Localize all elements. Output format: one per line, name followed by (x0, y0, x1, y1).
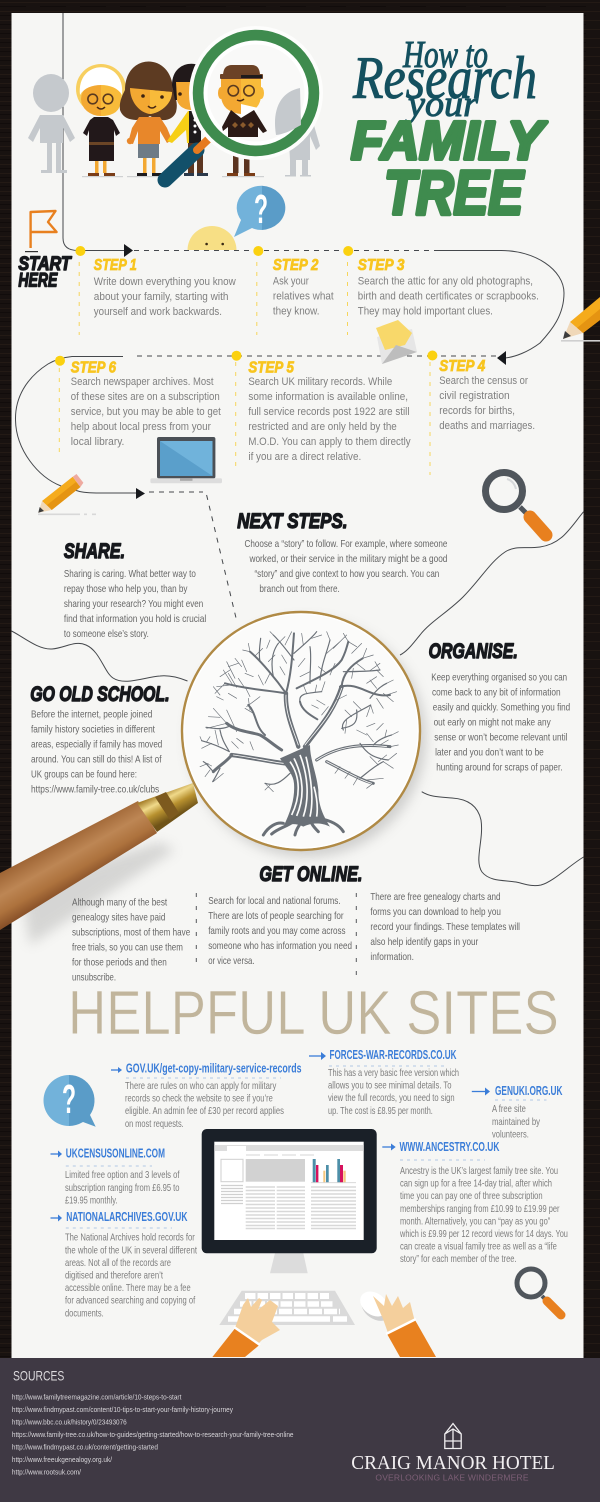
step 6: STEP 6 (71, 360, 116, 377)
share block (64, 540, 206, 640)
step 1: about your family, starting with (94, 291, 228, 303)
next steps block: NEXT STEPS. (237, 510, 348, 533)
sources list: http://www.findmypast.co.uk/content/getting-started (12, 1442, 158, 1452)
hotel logo (351, 1424, 555, 1483)
share block: find that information you hold is crucial (64, 613, 206, 625)
next steps block: Choose a “story” to follow. For example, where someone (244, 538, 448, 550)
site: genuki: A free site (492, 1103, 526, 1115)
site: forces war records: view the full records, you need to sign (328, 1092, 455, 1104)
get online column 1: for those periods and then (72, 957, 167, 969)
old man portrait (218, 65, 267, 137)
site: national archives: areas. Not all of the records are (65, 1257, 171, 1269)
step 4: Search the census or (439, 375, 528, 387)
get online column 3: There are free genealogy charts and (370, 891, 501, 903)
screen bar chart (311, 1159, 356, 1183)
site: genuki: volunteers. (492, 1128, 529, 1140)
step 2 (273, 257, 334, 318)
title (351, 34, 548, 228)
grey ancestor left (28, 74, 75, 173)
step 4: records for births, (439, 405, 515, 417)
site: forces war records: FORCES-WAR-RECORDS.CO.UK (330, 1048, 456, 1062)
next steps block: “story” and give context to how you search. You can (254, 568, 439, 580)
organise block: ORGANISE. (429, 640, 518, 663)
get online column 3: information. (370, 951, 414, 963)
sources list: http://www.familytreemagazine.com/article/10-steps-to-start (12, 1392, 182, 1402)
icon: pencil right (561, 297, 600, 342)
step 1: STEP 1 (94, 257, 137, 274)
icon: pencil left (38, 474, 96, 515)
hand on mouse (357, 1290, 395, 1326)
share block: sharing your research? You might even (64, 598, 203, 610)
share block: repay those who help you, than by (64, 583, 188, 595)
step 5 (248, 360, 411, 463)
illustration: family with magnifying glass (28, 26, 323, 180)
sources list: https://www.family-tree.co.uk/how-to-guides/getting-started/how-to-research-your-family-tree-online (12, 1430, 294, 1439)
site: forces war records (309, 1048, 459, 1117)
organise block (429, 640, 570, 774)
site: national archives: The National Archives hold records for (65, 1232, 195, 1244)
step 6: local library. (71, 436, 124, 448)
get online column 2: There are lots of people searching for (208, 910, 344, 922)
next steps block: worked, or their service in the military might be a good (249, 553, 448, 565)
get online column 2: someone who has information you need (208, 940, 352, 952)
site: genuki: GENUKI.ORG.UK (495, 1084, 562, 1098)
step 2: STEP 2 (273, 257, 318, 274)
step 4: deaths and marriages. (439, 420, 535, 432)
share block: to someone else’s story. (64, 628, 149, 640)
go old school block: areas, especially if family has moved (31, 739, 162, 751)
icon: question bubble (44, 1075, 96, 1127)
go old school block (30, 683, 170, 796)
hotel logo: OVERLOOKING LAKE WINDERMERE (375, 1473, 529, 1483)
get online column 2 (208, 895, 352, 967)
arrowheads (124, 244, 506, 499)
step 6 (71, 360, 221, 448)
grandmother (76, 64, 126, 177)
step 4: civil registration (439, 390, 510, 402)
step 5: Search UK military records. While (248, 376, 392, 388)
start here label: HERE (18, 271, 58, 292)
site: national archives: for advanced searching and copying of (65, 1295, 195, 1307)
site: genuki (472, 1084, 562, 1140)
icon: laptop (150, 437, 222, 483)
site: gov.uk (111, 1062, 302, 1130)
hotel logo: CRAIG MANOR HOTEL (351, 1452, 555, 1474)
start here label (18, 254, 72, 292)
icon: speech bubble with question mark: ? (254, 186, 268, 232)
get online column 2: or vice versa. (208, 955, 254, 967)
step 5: STEP 5 (248, 360, 295, 377)
organise block: out early on might not make any (434, 717, 551, 729)
site: gov.uk: on most requests. (125, 1118, 184, 1130)
grey figure seen through lens (275, 88, 301, 135)
get online column 3 (370, 891, 520, 963)
get online column 3: record your findings. These templates will (370, 921, 520, 933)
site: gov.uk: records so check the website to see if you’re (125, 1093, 273, 1105)
organise block: hunting around for scraps of paper. (436, 762, 562, 774)
large magnifying glass handle (0, 783, 198, 945)
site: ancestry: WWW.ANCESTRY.CO.UK (400, 1140, 499, 1154)
step 3: They may hold important clues. (358, 306, 493, 318)
step 3 (358, 257, 539, 318)
magnifier handle (165, 132, 216, 180)
site: ukcensusonline: UKCENSUSONLINE.COM (66, 1147, 165, 1161)
get online column 3: forms you can download to help you (370, 906, 501, 918)
site: genuki: maintained by (492, 1116, 541, 1128)
step 6: help about local press from your (71, 421, 211, 433)
site: national archives: the whole of the UK in several different (65, 1244, 197, 1256)
site: gov.uk: There are rules on who can apply for military (125, 1080, 277, 1092)
icon: search magnifier orange (486, 472, 546, 535)
step 5: M.O.D. You can apply to them directly (248, 436, 411, 448)
title: Research (352, 45, 537, 111)
step 6: Search newspaper archives. Most (71, 376, 214, 388)
step 5: full service records post 1922 are still (248, 406, 410, 418)
step 2: Ask your (273, 276, 309, 288)
go old school block: family history societies in different (31, 724, 155, 736)
go old school block: around. You can still do this! A list of (31, 754, 162, 766)
hand on keyboard (235, 1298, 280, 1344)
title: your (404, 84, 479, 125)
title: How to (402, 34, 488, 76)
organise block: sense or won’t become relevant until (434, 732, 568, 744)
site: gov.uk: GOV.UK/get-copy-military-service-records (126, 1062, 302, 1076)
site: ancestry: story” for each member of the tree. (400, 1253, 517, 1265)
sources list: http://www.bbc.co.uk/history/0/23493076 (12, 1418, 127, 1426)
step 4: STEP 4 (439, 358, 485, 375)
site: national archives (50, 1210, 197, 1319)
get online column 3: also help identify gaps in your (370, 936, 479, 948)
pathway lines (12, 13, 584, 977)
step 3: birth and death certificates or scrapbooks. (358, 290, 539, 302)
icon: start flag (25, 211, 57, 252)
site: ukcensusonline (50, 1147, 180, 1206)
step 1 (94, 257, 236, 318)
get online column 1: unsubscribe. (72, 972, 116, 984)
step 1: Write down everything you know (94, 276, 236, 288)
step 4 (439, 358, 535, 432)
step 3: STEP 3 (358, 257, 405, 274)
sources list (12, 1392, 294, 1476)
mother (120, 62, 177, 177)
grey descendant right (285, 122, 320, 176)
sources list: http://www.findmypast.com/content/10-tips-to-start-your-family-history-journey (12, 1405, 233, 1414)
step 5: if you are a direct relative. (248, 451, 361, 463)
get online column 1: free trials, so you can use them (72, 942, 183, 954)
father (167, 64, 208, 176)
step 5: restricted and are only held by the (248, 421, 397, 433)
icon: small search magnifier (517, 1269, 561, 1315)
site: national archives: digitised and therefore aren’t (65, 1270, 163, 1282)
step 5: some information is available online, (248, 391, 408, 403)
icon: envelope with note (376, 320, 417, 364)
icon: question bubble: ? (62, 1076, 76, 1122)
get online column 1: genealogy sites have paid (72, 912, 165, 924)
old man's legs (222, 150, 264, 177)
get online column 1 (72, 897, 190, 984)
get online heading: GET ONLINE. (259, 863, 362, 886)
sources list: http://www.freeukgenealogy.org.uk/ (12, 1455, 113, 1464)
site: ukcensusonline: Limited free option and 3 levels of (65, 1169, 180, 1181)
next steps block (237, 510, 448, 595)
go old school block: GO OLD SCHOOL. (30, 683, 170, 706)
sources heading: SOURCES (13, 1368, 64, 1384)
get online column 2: Search for local and national forums. (208, 895, 341, 907)
start here label: START (18, 254, 72, 275)
get online column 1: subscriptions, most of them have (72, 927, 190, 939)
title: FAMILY (351, 111, 548, 171)
sources list: http://www.rootsuk.com/ (12, 1468, 82, 1476)
go old school block: Before the internet, people joined (31, 709, 152, 721)
organise block: later and you don’t want to be (435, 747, 544, 759)
site: national archives: documents. (65, 1307, 104, 1319)
site: forces war records: allows you to see minimal details. To (328, 1080, 452, 1092)
get online column 1: Although many of the best (72, 897, 167, 909)
go old school block: UK groups can be found here: (31, 769, 137, 781)
icon: speech bubble with question mark (234, 186, 285, 237)
step markers (55, 246, 437, 366)
site: forces war records: up. The cost is £8.95 per month. (328, 1105, 433, 1117)
step 1: yourself and work backwards. (94, 306, 222, 318)
site: ancestry (382, 1140, 568, 1265)
step 6: of these sites are on a subscription (71, 391, 220, 403)
site: national archives: accessible online. There may be a fee (65, 1282, 191, 1294)
site: ukcensusonline: £19.95 monthly. (65, 1194, 118, 1206)
footer panel (0, 1358, 600, 1502)
step 2: they know. (273, 306, 320, 318)
share block: SHARE. (64, 540, 125, 563)
step 3: Search the attic for any old photographs, (358, 276, 533, 288)
magnifier lens (189, 26, 323, 160)
icon: peeking yellow face (188, 226, 236, 250)
next steps block: branch out from there. (259, 583, 340, 595)
site: ukcensusonline: subscription ranging from £6.95 to (65, 1182, 180, 1194)
step 6: service, but you may be able to get (71, 406, 221, 418)
computer monitor (202, 1129, 377, 1273)
site: national archives: NATIONALARCHIVES.GOV.UK (66, 1210, 188, 1224)
tree drawing (200, 632, 398, 835)
step 2: relatives what (273, 290, 334, 302)
title: TREE (384, 159, 524, 228)
large magnifying glass lens with tree (182, 612, 426, 857)
site: gov.uk: eligible. An admin fee of £30 per record applies (125, 1105, 284, 1117)
get online column 2: family roots and you may come across (208, 925, 346, 937)
organise block: come back to any bit of information (432, 687, 561, 699)
site: forces war records: This has a very basic free version which (328, 1067, 459, 1079)
keyboard and hands (212, 1286, 436, 1357)
share block: Sharing is caring. What better way to (64, 568, 196, 580)
site: ancestry: time you can pay one of three subscription (400, 1190, 543, 1202)
go old school block: https://www.family-tree.co.uk/clubs (31, 784, 159, 796)
